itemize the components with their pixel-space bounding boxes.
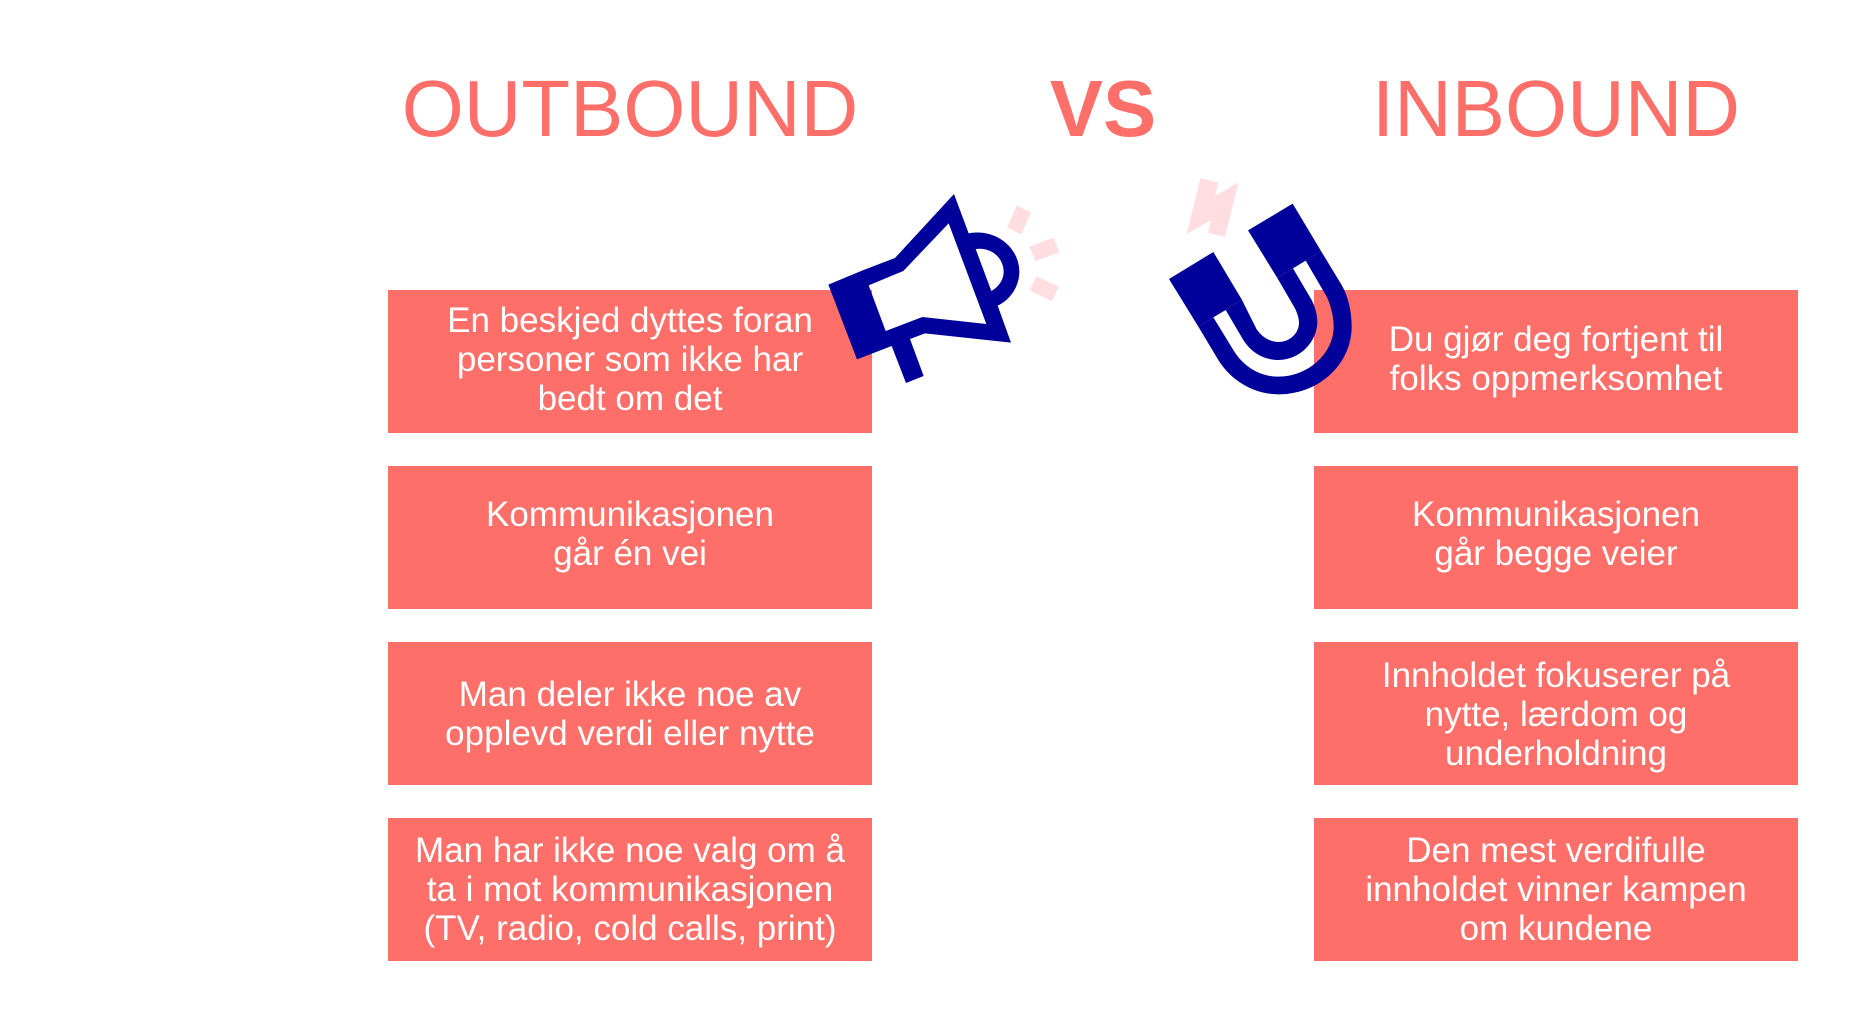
outbound box 2: Kommunikasjonen — [486, 494, 774, 534]
outbound box 3: Man deler ikke noe av — [459, 674, 801, 714]
inbound box 1: folks oppmerksomhet — [1390, 358, 1722, 398]
outbound box 4: ta i mot kommunikasjonen — [427, 870, 833, 909]
inbound box 2 — [1314, 466, 1798, 609]
icon: lightning spark — [1187, 178, 1238, 237]
outbound box 1: personer som ikke har — [457, 340, 803, 379]
inbound box 3 — [1314, 642, 1798, 785]
title: vs: VS — [1050, 64, 1156, 153]
icon: sound sparks — [1007, 206, 1059, 301]
inbound box 1: Du gjør deg fortjent til — [1389, 320, 1723, 358]
inbound box 3: Innholdet fokuserer på — [1382, 656, 1730, 695]
inbound box 1 — [1314, 290, 1798, 433]
icon: megaphone — [828, 194, 1019, 383]
title: outbound: OUTBOUND — [402, 64, 858, 153]
inbound box 3: nytte, lærdom og — [1425, 695, 1687, 734]
outbound box 4 — [388, 818, 872, 961]
inbound box 3: underholdning — [1445, 734, 1667, 773]
inbound box 4: Den mest verdifulle — [1406, 831, 1706, 870]
outbound box 3: opplevd verdi eller nytte — [445, 714, 815, 752]
outbound box 3 — [388, 642, 872, 785]
outbound box 1 — [388, 290, 872, 433]
inbound box 4 — [1314, 818, 1798, 961]
outbound box 2 — [388, 466, 872, 609]
outbound box 4: Man har ikke noe valg om å — [415, 831, 845, 870]
inbound box 2: går begge veier — [1434, 534, 1678, 572]
outbound box 1: En beskjed dyttes foran — [447, 301, 813, 340]
inbound box 4: innholdet vinner kampen — [1365, 870, 1747, 909]
inbound box 2: Kommunikasjonen — [1412, 494, 1700, 534]
inbound box 4: om kundene — [1460, 909, 1652, 948]
icon: magnet — [1169, 204, 1352, 394]
outbound box 1: bedt om det — [538, 379, 722, 418]
outbound box 2: går én vei — [553, 534, 707, 572]
outbound box 4: (TV, radio, cold calls, print) — [423, 909, 836, 948]
title: inbound: INBOUND — [1372, 64, 1740, 153]
